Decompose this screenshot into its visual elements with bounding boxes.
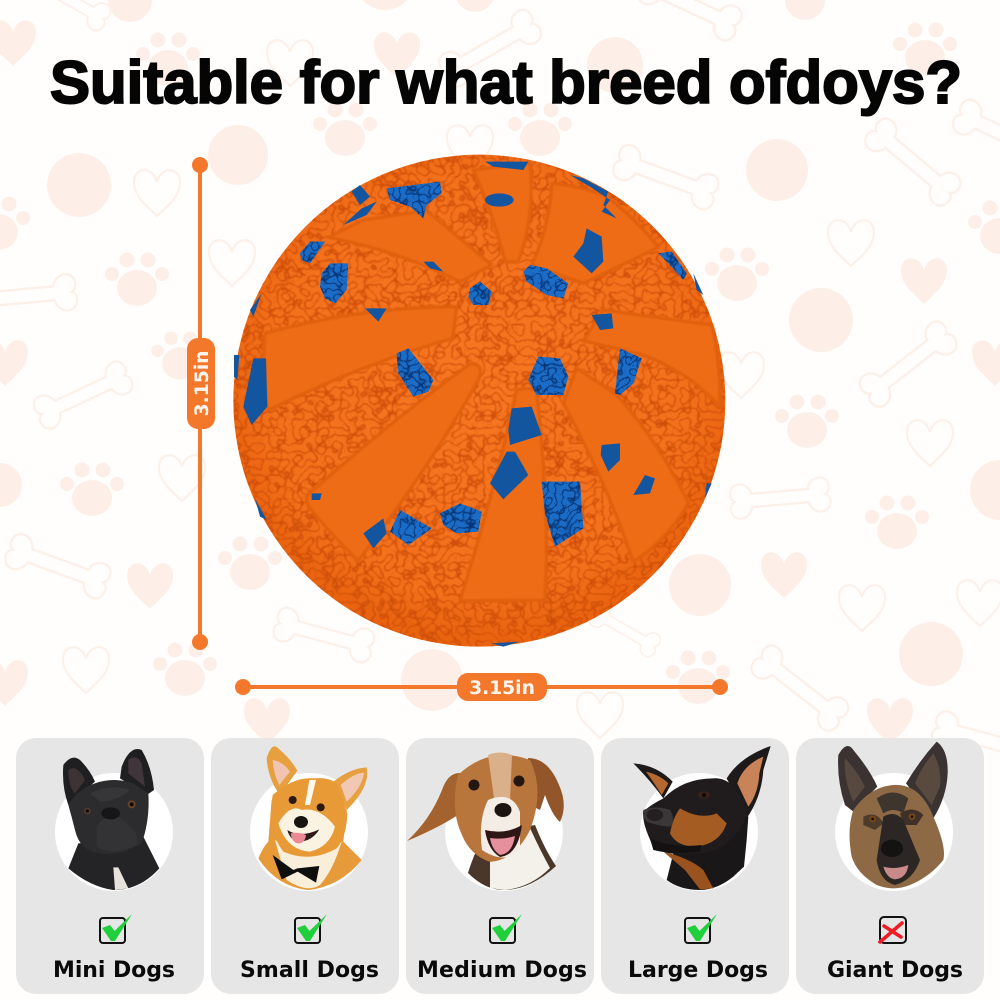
title: Suitable for what breed ofdoys? bbox=[50, 49, 962, 116]
icon: check bbox=[295, 914, 327, 943]
card: medium dogs bbox=[406, 738, 594, 994]
dog: french bulldog bbox=[63, 749, 159, 890]
label: small dogs: Small Dogs bbox=[240, 958, 379, 983]
icon: check bbox=[100, 914, 132, 943]
card: large dogs bbox=[601, 738, 789, 994]
dog: doberman bbox=[633, 746, 771, 890]
icon: check bbox=[685, 914, 717, 943]
vertical dimension line: 3.15in bbox=[192, 351, 213, 416]
vertical dimension line bbox=[187, 157, 215, 650]
card: mini dogs bbox=[16, 738, 204, 994]
dog: corgi bbox=[258, 746, 367, 890]
icon: cross bbox=[880, 917, 906, 943]
label: large dogs: Large Dogs bbox=[628, 958, 768, 983]
icon: check bbox=[490, 914, 522, 943]
card: giant dogs bbox=[796, 738, 984, 994]
label: giant dogs: Giant Dogs bbox=[827, 958, 963, 983]
dog: beagle bbox=[407, 752, 564, 890]
horizontal dimension line bbox=[235, 673, 728, 701]
dog: german shepherd bbox=[838, 742, 948, 888]
label: medium dogs: Medium Dogs bbox=[417, 958, 587, 983]
orange dog ball bbox=[233, 155, 725, 647]
size cards bbox=[16, 738, 984, 994]
card: small dogs bbox=[211, 738, 399, 994]
horizontal dimension line: 3.15in bbox=[469, 678, 535, 699]
label: mini dogs: Mini Dogs bbox=[53, 958, 175, 983]
